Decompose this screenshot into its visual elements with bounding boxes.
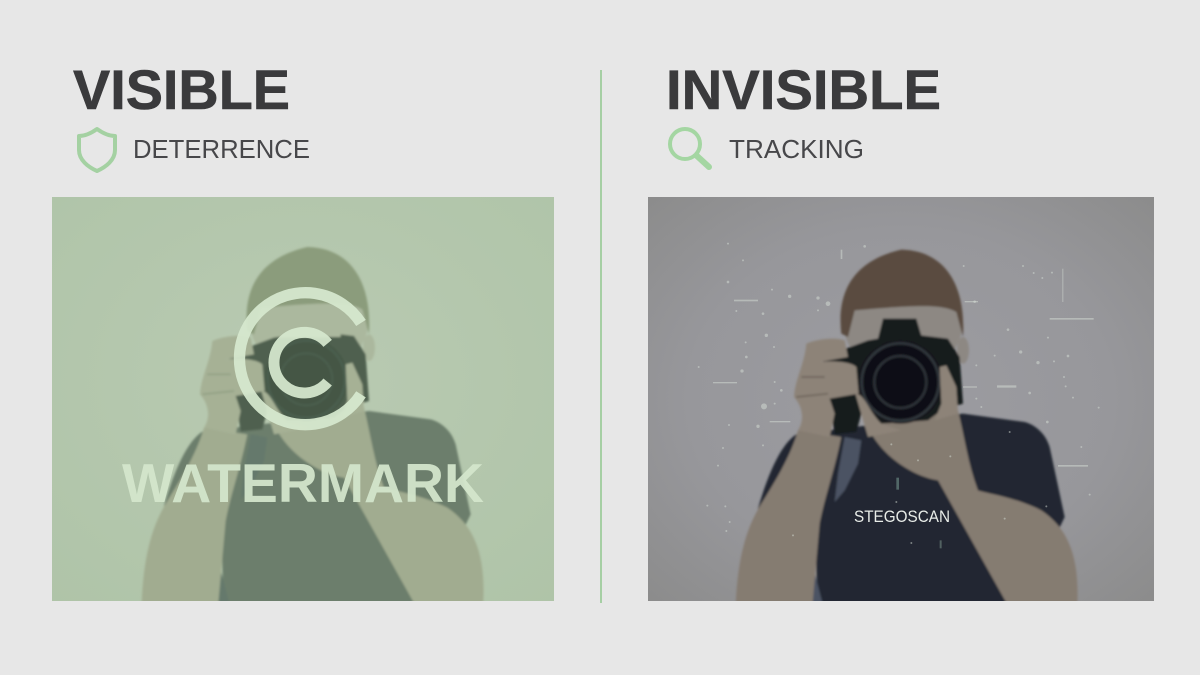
photo of photographer, green tint: [141, 247, 484, 615]
icon: magnifying glass: [670, 129, 709, 167]
panel: visible watermark photo: [52, 197, 554, 615]
icon: shield: [79, 129, 115, 171]
hidden data particles: [698, 243, 1100, 548]
subheading: tracking: TRACKING: [729, 134, 864, 164]
watermark label: WATERMARK: [122, 452, 484, 514]
subheading: deterrence: DETERRENCE: [133, 134, 310, 164]
divider: [600, 70, 602, 603]
photo of photographer, grey tint: [735, 250, 1078, 618]
stegoscan label: STEGOSCAN: [854, 507, 950, 526]
icon: copyright symbol: [239, 293, 361, 425]
heading: invisible: INVISIBLE: [666, 58, 941, 121]
panel: invisible watermark photo: [648, 197, 1154, 618]
heading: visible: VISIBLE: [73, 58, 290, 121]
